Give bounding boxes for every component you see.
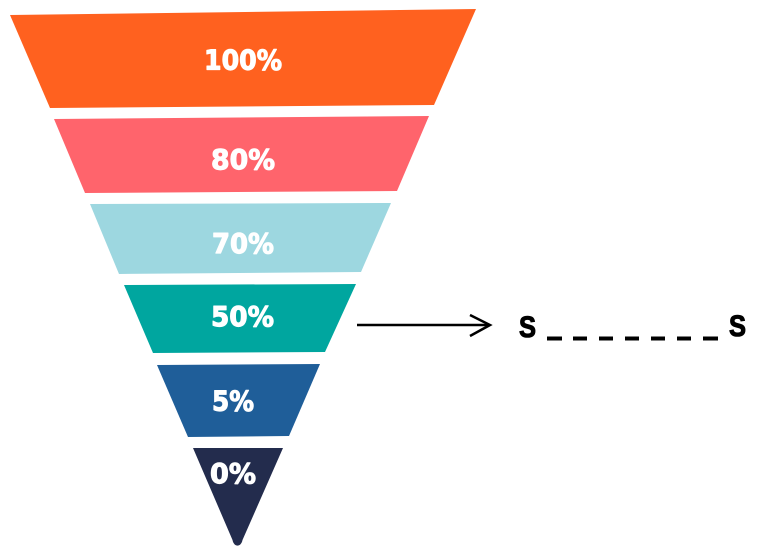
answer blank: S _ _ _ _ _ _ _ S: S — [729, 310, 746, 343]
funnel layer: 50% — [124, 284, 356, 353]
funnel layer: 70%: 70% — [212, 227, 274, 260]
funnel layer: 100%: 100% — [204, 44, 282, 76]
funnel layer: 70% — [90, 203, 391, 274]
funnel layer: 50%: 50% — [211, 300, 274, 333]
funnel layer: 0% — [193, 448, 283, 546]
funnel layer: 80% — [54, 116, 429, 193]
answer blank: S _ _ _ _ _ _ _ S: S — [519, 311, 536, 344]
arrow pointing to answer blank — [357, 315, 490, 336]
answer blank: S _ _ _ _ _ _ _ S — [519, 310, 746, 344]
funnel layer: 80%: 80% — [211, 143, 275, 176]
funnel layer: 100% — [10, 9, 476, 108]
funnel layer: 0%: 0% — [210, 457, 256, 490]
funnel layer: 5%: 5% — [212, 384, 254, 418]
funnel layer: 5% — [157, 364, 320, 437]
